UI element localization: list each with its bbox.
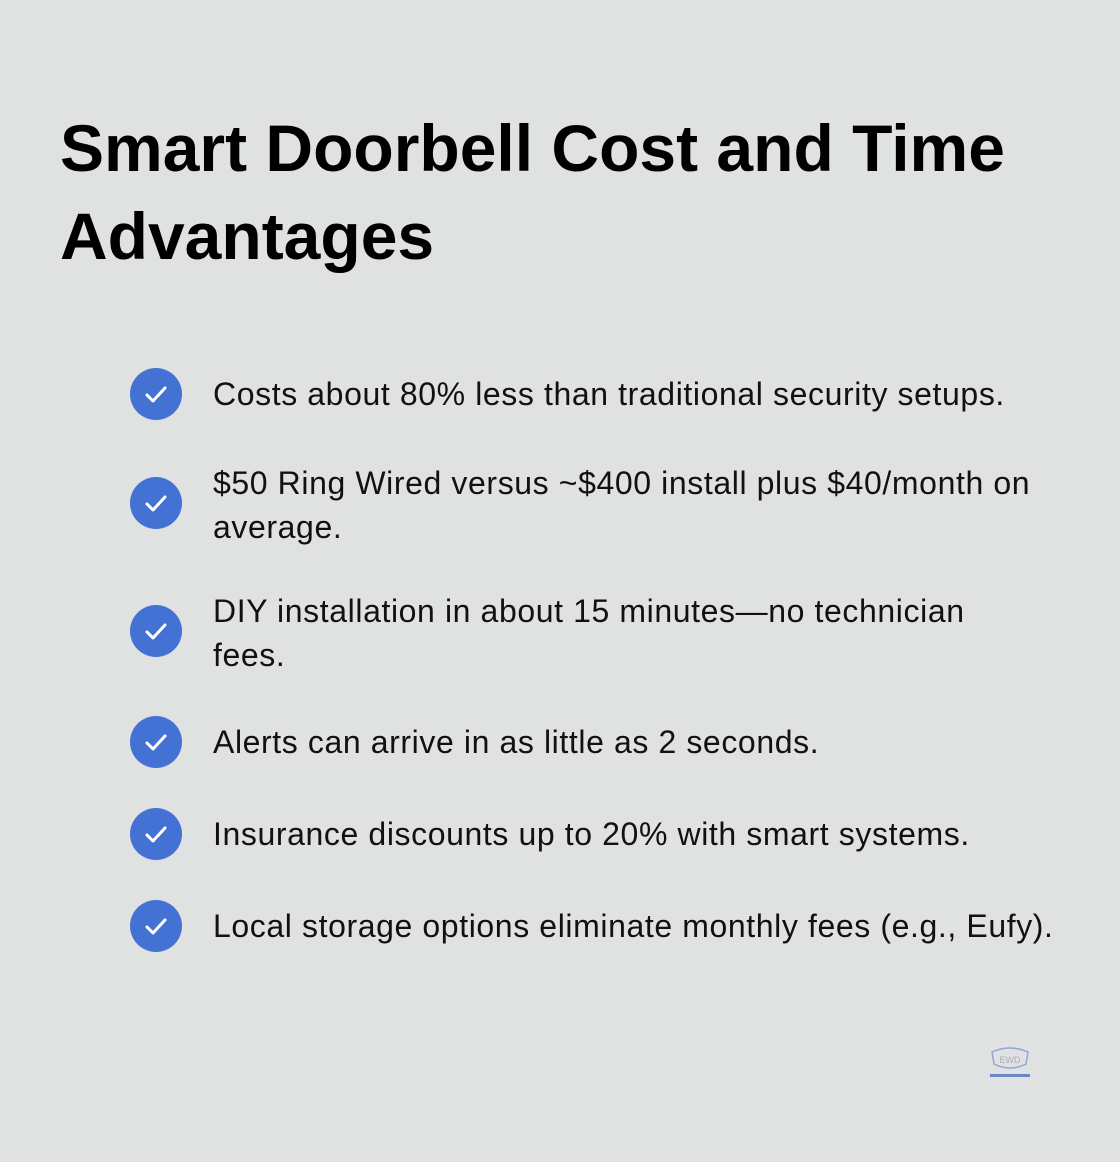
item 6 — [130, 900, 1054, 952]
icon: check — [130, 368, 182, 420]
logo: EWD — [1000, 1055, 1021, 1065]
item 4 — [130, 716, 819, 768]
icon: check — [130, 605, 182, 657]
item 1 — [130, 368, 1005, 420]
text: $50 Ring Wired versus ~$400 install plus $40/month on average. — [213, 465, 1030, 545]
text: Costs about 80% less than traditional security setups. — [213, 376, 1005, 412]
text: DIY installation in about 15 minutes—no technician fees. — [213, 593, 965, 673]
icon: check — [130, 716, 182, 768]
icon: check — [130, 477, 182, 529]
icon: check — [130, 808, 182, 860]
logo — [990, 1047, 1030, 1077]
text: Insurance discounts up to 20% with smart systems. — [213, 816, 970, 852]
item 3 — [130, 593, 965, 673]
title: Smart Doorbell Cost and Time Advantages — [60, 111, 1005, 273]
item 5 — [130, 808, 970, 860]
item 2 — [130, 465, 1030, 545]
text: Alerts can arrive in as little as 2 seconds. — [213, 724, 819, 760]
icon: check — [130, 900, 182, 952]
text: Local storage options eliminate monthly fees (e.g., Eufy). — [213, 908, 1054, 944]
